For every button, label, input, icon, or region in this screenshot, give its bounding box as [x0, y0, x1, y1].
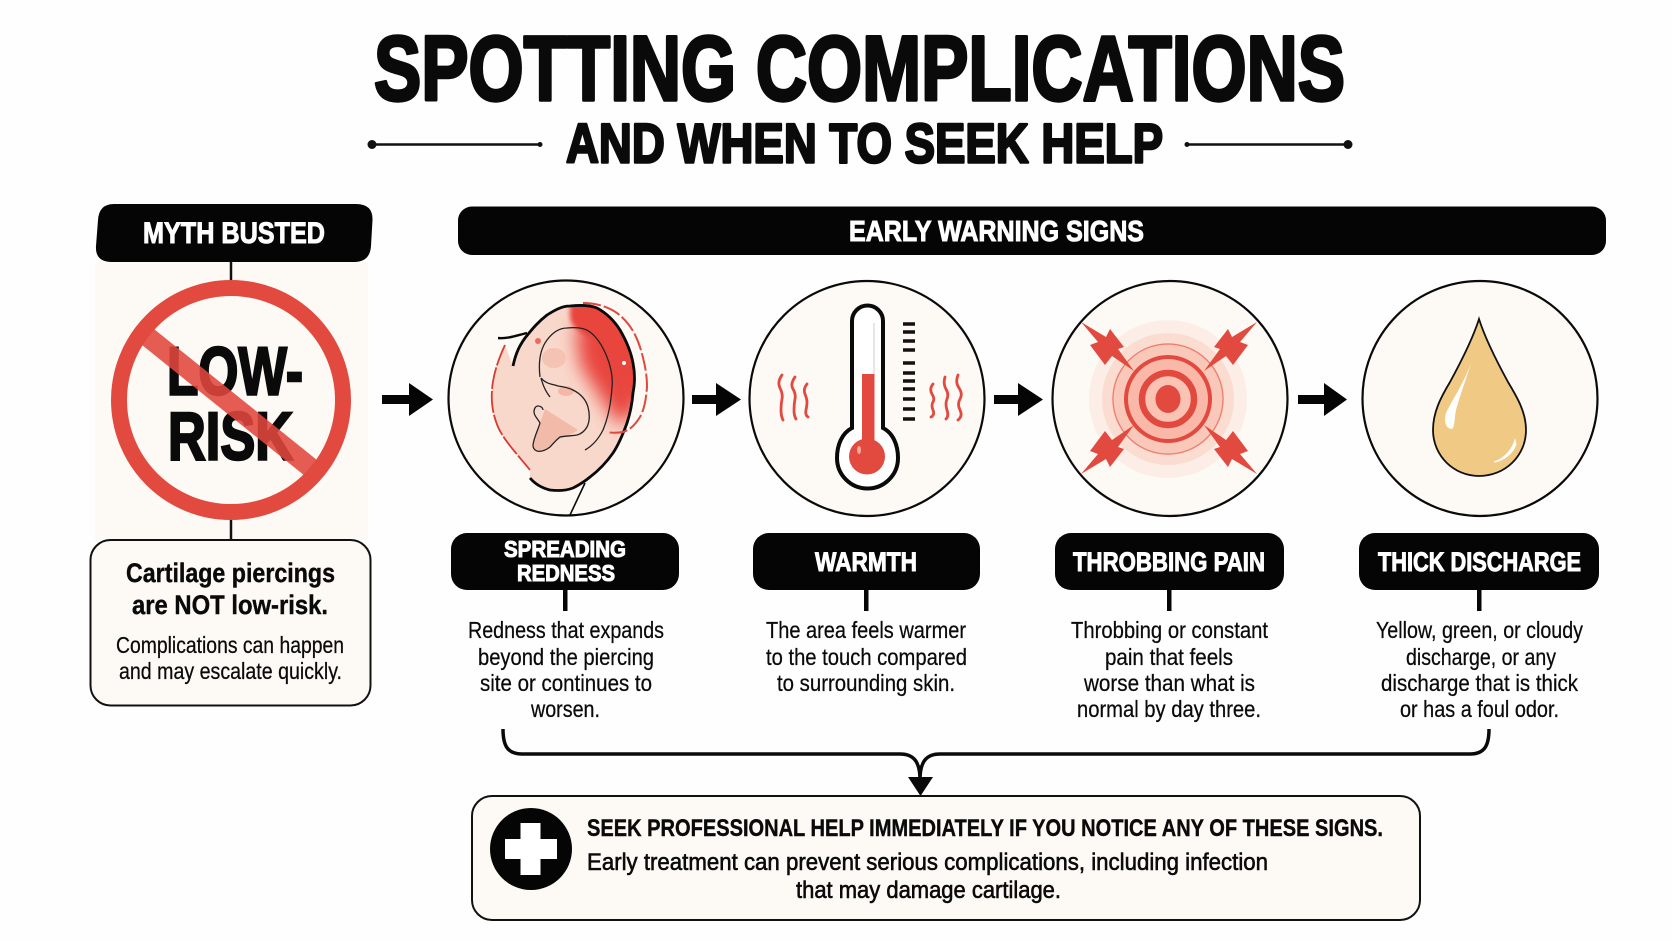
description: warmth: to the touch compared [766, 644, 967, 670]
label: throbbing pain [1055, 533, 1284, 611]
label: spreading redness [451, 533, 679, 611]
description: throbbing pain: pain that feels [1105, 644, 1233, 670]
low-risk crossed out sign: LOW- [167, 334, 303, 410]
thermometer ticks [903, 324, 915, 419]
callout: seek professional help: that may damage cartilage. [796, 877, 1061, 904]
low-risk crossed out sign: RISK [168, 398, 293, 474]
low-risk crossed out sign [119, 288, 343, 512]
label: warmth [753, 533, 980, 611]
label: throbbing pain: THROBBING PAIN [1073, 547, 1265, 577]
myth explanation box: Cartilage piercings [126, 558, 335, 588]
label: warmth: WARMTH [815, 547, 917, 577]
description: spreading redness: site or continues to [480, 670, 652, 696]
description: throbbing pain: normal by day three. [1077, 696, 1261, 722]
subtitle: AND WHEN TO SEEK HELP [566, 112, 1163, 174]
myth explanation box [90, 540, 370, 706]
description: spreading redness: Redness that expands [468, 617, 664, 643]
label: thick discharge [1359, 533, 1599, 611]
arrow: redness to warmth [692, 383, 741, 416]
connector lines [230, 262, 232, 540]
panel: spreading redness [448, 280, 684, 722]
description: throbbing pain: Throbbing or constant [1071, 617, 1268, 643]
myth busted heading: MYTH BUSTED [143, 217, 325, 250]
icon: thermometer [750, 281, 984, 516]
myth explanation box: and may escalate quickly. [119, 658, 342, 684]
description: thick discharge: discharge that is thick [1381, 670, 1578, 696]
icon: medical cross [490, 808, 572, 890]
description: thick discharge [1376, 617, 1583, 722]
description: thick discharge: discharge, or any [1406, 644, 1556, 670]
panel: throbbing pain [1052, 281, 1288, 722]
bracket arrow [503, 729, 1489, 796]
callout: seek professional help [472, 796, 1420, 920]
label: spreading redness: REDNESS [517, 560, 615, 586]
label: spreading redness: SPREADING [504, 536, 626, 562]
description: throbbing pain [1071, 617, 1268, 722]
description: warmth [766, 617, 967, 696]
callout: seek professional help: SEEK PROFESSIONAL HELP IMMEDIATELY IF YOU NOTICE ANY OF THESE SIGNS. [587, 815, 1383, 842]
arrow: myth to signs [382, 383, 433, 416]
description: spreading redness [468, 617, 664, 722]
icon: pain target with lightning bolts [1052, 281, 1288, 516]
title: SPOTTING COMPLICATIONS [374, 18, 1345, 120]
heat waves [779, 375, 961, 420]
arrow: pain to discharge [1298, 383, 1347, 416]
icon: inflamed ear [448, 280, 684, 516]
bolt top right [1204, 322, 1257, 371]
description: spreading redness: worsen. [530, 696, 600, 722]
description: throbbing pain: worse than what is [1083, 670, 1255, 696]
description: warmth: The area feels warmer [766, 617, 966, 643]
bolt top left [1081, 322, 1134, 371]
myth busted heading [96, 204, 373, 262]
callout: seek professional help: Early treatment can prevent serious complications, including infection [587, 849, 1268, 876]
description: thick discharge: or has a foul odor. [1400, 696, 1559, 722]
panel: myth busted [90, 204, 373, 706]
myth explanation box: Complications can happen [116, 632, 344, 658]
description: spreading redness: beyond the piercing [478, 644, 654, 670]
bolt bottom right [1204, 425, 1257, 474]
early warning signs heading: EARLY WARNING SIGNS [849, 216, 1144, 248]
panel: thick discharge [1359, 281, 1599, 722]
icon: discharge drop [1362, 281, 1598, 516]
arrow: warmth to pain [994, 383, 1043, 416]
myth panel background [95, 262, 368, 540]
label: thick discharge: THICK DISCHARGE [1378, 547, 1581, 577]
myth explanation box: are NOT low-risk. [132, 590, 328, 620]
panel: warmth [750, 281, 984, 696]
early warning signs heading [458, 206, 1606, 255]
bolt bottom left [1081, 425, 1134, 474]
description: warmth: to surrounding skin. [777, 670, 955, 696]
description: thick discharge: Yellow, green, or cloudy [1376, 617, 1583, 643]
